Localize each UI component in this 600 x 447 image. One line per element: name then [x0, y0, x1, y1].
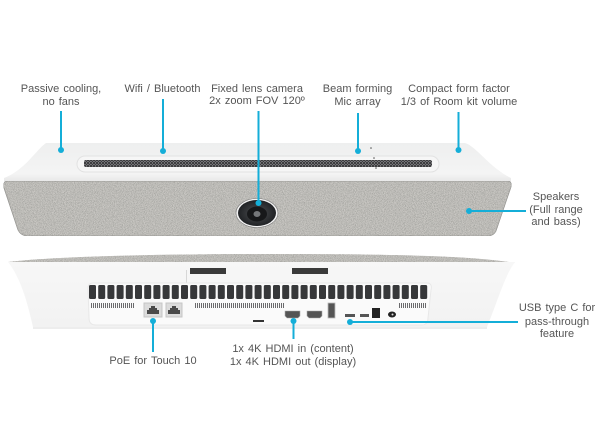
callout: USB type C: feature [540, 328, 574, 340]
callout: speakers: Speakers [533, 191, 580, 203]
callout: beam forming mic array: Beam forming [323, 83, 392, 95]
callout: fixed lens camera: 2x zoom FOV 120º [209, 95, 305, 107]
callout: fixed lens camera [209, 83, 305, 206]
speaker fabric [4, 181, 511, 236]
mounting tabs [186, 268, 328, 283]
callout: speakers: (Full range [529, 204, 583, 216]
callout: fixed lens camera: Fixed lens camera [211, 83, 304, 95]
callout: USB type C: USB type C for [519, 302, 596, 314]
round connector [388, 312, 396, 318]
callout: speakers [466, 191, 583, 228]
connector recess [88, 283, 431, 325]
mic dots [370, 147, 377, 169]
camera lens [236, 198, 278, 228]
callout: speakers: and bass) [531, 216, 581, 228]
callout: compact form factor: Compact form factor [408, 83, 510, 95]
callout: wifi and bluetooth [125, 83, 200, 154]
HDMI ports [285, 311, 322, 318]
microphone and vent slot [77, 156, 439, 172]
callout: passive cooling [21, 83, 101, 153]
white back body [8, 262, 515, 327]
callout: wifi and bluetooth: Wifi / Bluetooth [125, 83, 200, 95]
callout: HDMI [230, 318, 356, 368]
reset slot [253, 320, 264, 322]
callout: compact form factor: 1/3 of Room kit volume [401, 96, 517, 108]
callout: USB type C [347, 302, 596, 340]
fabric strip [8, 254, 515, 263]
callout: passive cooling: no fans [42, 96, 80, 108]
callout: beam forming mic array: Mic array [334, 96, 381, 108]
callout: PoE for Touch 10 [109, 318, 197, 367]
callout: HDMI: 1x 4K HDMI in (content) [232, 343, 354, 355]
callout: compact form factor [401, 83, 517, 153]
callout: passive cooling: Passive cooling, [21, 83, 101, 95]
power port [372, 308, 380, 318]
USB C ports [345, 314, 369, 317]
USB A port [328, 303, 335, 318]
callout: USB type C: pass-through [525, 316, 589, 328]
small vents [91, 303, 427, 308]
panel: back of device [8, 254, 515, 328]
panel: front of device [4, 143, 511, 236]
top white surface [4, 143, 511, 184]
cooling vents [89, 285, 427, 299]
callout: HDMI: 1x 4K HDMI out (display) [230, 356, 356, 368]
callout: PoE for Touch 10: PoE for Touch 10 [109, 355, 197, 367]
ethernet ports [144, 303, 182, 317]
callout: beam forming mic array [323, 83, 392, 154]
